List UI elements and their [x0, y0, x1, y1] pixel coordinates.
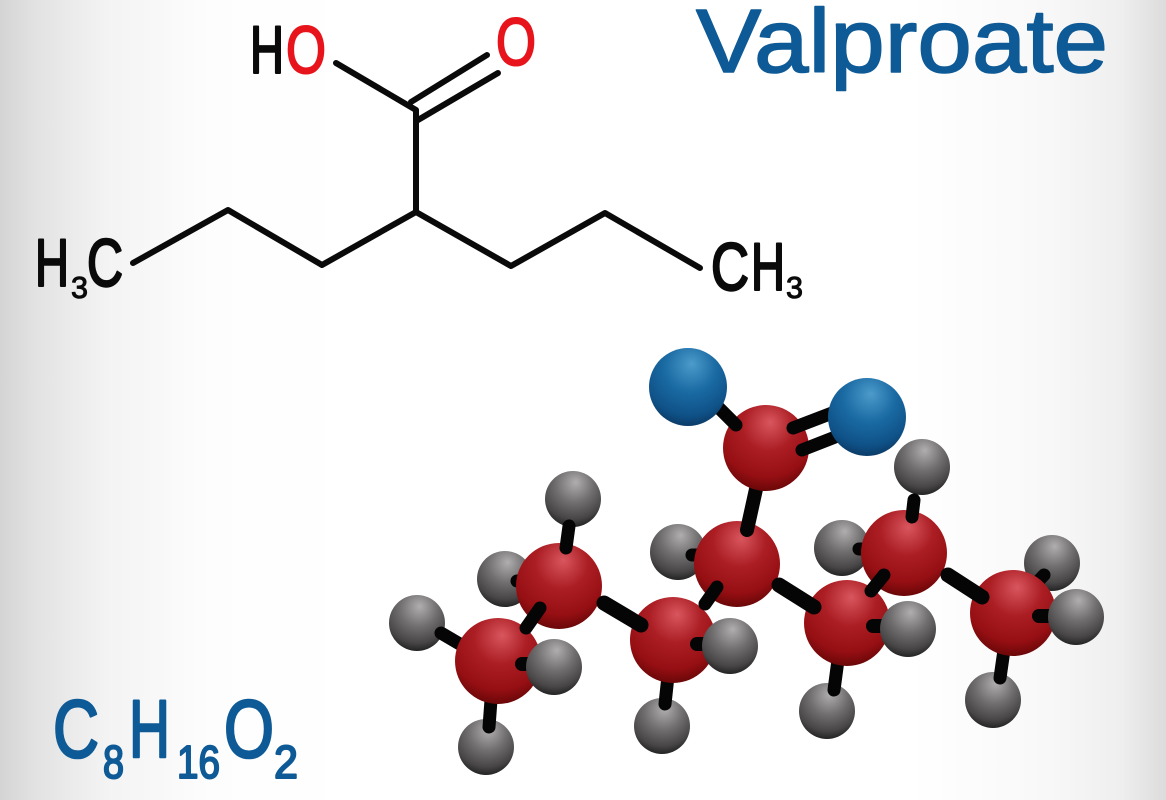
sticks behind carbon atoms	[441, 549, 1044, 727]
label: CH3	[711, 230, 803, 305]
label: HO: H	[250, 13, 284, 88]
chemical formula C8H16O2: 8	[103, 736, 124, 788]
back hydrogen atoms	[389, 439, 1080, 775]
label: CH3: H	[751, 230, 785, 305]
label: CH3: 3	[786, 270, 803, 305]
label: H3C: C	[87, 226, 123, 301]
ball and stick 3D model	[389, 348, 1104, 775]
chemical formula C8H16O2: 2	[274, 736, 298, 788]
label: CH3: C	[711, 230, 749, 305]
label: H3C: 3	[71, 270, 88, 305]
label: HO: O	[286, 13, 326, 88]
skeletal structural formula	[35, 5, 803, 305]
label: HO	[250, 13, 326, 88]
label: H3C	[35, 226, 123, 305]
label: H3C: H	[35, 226, 69, 301]
chemical formula C8H16O2	[53, 684, 298, 788]
central stick to carbonyl carbon	[747, 480, 758, 530]
chemical formula C8H16O2: O	[224, 684, 274, 775]
chemical formula C8H16O2: 16	[177, 736, 220, 788]
bonds of skeletal formula	[133, 55, 700, 268]
carbonyl carbon atom	[723, 405, 809, 491]
label: O: O	[496, 5, 536, 80]
carbon atoms	[455, 510, 1056, 704]
chemical formula C8H16O2: H	[129, 684, 170, 775]
chemical formula C8H16O2: C	[53, 684, 99, 775]
front hydrogen atoms	[526, 589, 1104, 695]
front sticks	[522, 405, 1048, 664]
oxygen atoms	[649, 348, 906, 456]
